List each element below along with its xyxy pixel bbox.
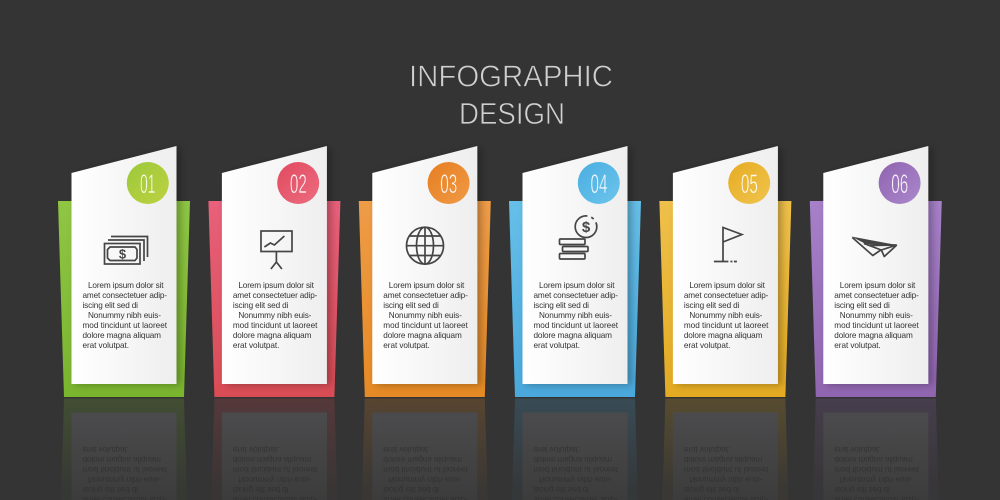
- reflection 6: erat volutpat.: [834, 445, 881, 454]
- reflection 5: erat volutpat.: [684, 445, 730, 454]
- reflection 6: dolore magna aliquam: [834, 455, 913, 464]
- body text 6: iscing elit sed di: [834, 301, 890, 310]
- body text 2: mod tincidunt ut laoreet: [233, 321, 318, 330]
- body text 5: erat volutpat.: [684, 341, 730, 350]
- card 3: orange globe: [359, 146, 491, 397]
- body text 4: Nonummy nibh euis-: [539, 311, 612, 320]
- icon: coins: $: [582, 219, 591, 236]
- reflection 2: dolore magna aliquam: [233, 455, 312, 464]
- body text 2: [233, 281, 318, 350]
- body text 4: Lorem ipsum dolor sit: [539, 281, 615, 290]
- body text 5: [684, 281, 769, 350]
- number badge 02: 02: [290, 169, 307, 199]
- reflection 3: iscing elit sed di: [383, 485, 439, 494]
- body text 3: [383, 281, 469, 350]
- body text 6: dolore magna aliquam: [834, 331, 913, 340]
- body text 4: mod tincidunt ut laoreet: [534, 321, 619, 330]
- title: INFOGRAPHIC: [409, 58, 613, 94]
- reflection 4: Nonummy nibh euis-: [539, 475, 612, 484]
- body text 5: amet consectetuer adip-: [684, 291, 769, 300]
- body text 5: Nonummy nibh euis-: [689, 311, 763, 320]
- body text 4: amet consectetuer adip-: [534, 291, 618, 300]
- body text 6: amet consectetuer adip-: [834, 291, 919, 300]
- reflection 1: mod tincidunt ut laoreet: [82, 465, 168, 474]
- reflection 5: dolore magna aliquam: [684, 455, 763, 464]
- reflection 4: dolore magna aliquam: [534, 455, 612, 464]
- body text 6: erat volutpat.: [834, 341, 881, 350]
- body text 4: dolore magna aliquam: [534, 331, 612, 340]
- body text 1: Nonummy nibh euis-: [88, 311, 161, 320]
- body text 5: Lorem ipsum dolor sit: [689, 281, 766, 290]
- reflection 3: erat volutpat.: [383, 445, 430, 454]
- body text 1: iscing elit sed di: [82, 301, 138, 310]
- reflection 1: erat volutpat.: [82, 445, 129, 454]
- number badge 04: 04: [590, 169, 608, 199]
- icon: paper plane: [851, 236, 897, 256]
- reflection 1: [61, 398, 187, 500]
- body text 2: Lorem ipsum dolor sit: [238, 281, 315, 290]
- reflection 3: mod tincidunt ut laoreet: [383, 465, 469, 474]
- body text 3: mod tincidunt ut laoreet: [383, 321, 469, 330]
- body text 1: erat volutpat.: [82, 341, 129, 350]
- reflection 5: Nonummy nibh euis-: [689, 475, 763, 484]
- body text 2: iscing elit sed di: [233, 301, 289, 310]
- body text 1: Lorem ipsum dolor sit: [88, 281, 164, 290]
- body text 2: Nonummy nibh euis-: [238, 311, 312, 320]
- body text 2: dolore magna aliquam: [233, 331, 312, 340]
- reflection 2: mod tincidunt ut laoreet: [233, 465, 318, 474]
- number badge 01: 01: [140, 169, 156, 199]
- reflection 4: mod tincidunt ut laoreet: [534, 465, 619, 474]
- icon: globe: [406, 227, 444, 264]
- body text 3: Nonummy nibh euis-: [389, 311, 462, 320]
- number badge 02: [277, 162, 319, 204]
- white sheet 1: [72, 146, 176, 384]
- card 4: blue coins: [509, 146, 641, 397]
- number badge 03: [428, 162, 470, 204]
- card 6: purple paper plane: [810, 146, 942, 397]
- body text 1: dolore magna aliquam: [82, 331, 161, 340]
- back panel 1: [58, 201, 190, 397]
- number badge 05: [728, 162, 770, 204]
- body text 2: erat volutpat.: [233, 341, 279, 350]
- reflection 4: iscing elit sed di: [534, 485, 589, 494]
- body text 1: mod tincidunt ut laoreet: [82, 321, 168, 330]
- back panel 2: [208, 201, 340, 397]
- reflection 2: [211, 398, 337, 500]
- reflection 3: dolore magna aliquam: [383, 455, 462, 464]
- white sheet 6: [823, 146, 928, 384]
- body text 2: amet consectetuer adip-: [233, 291, 318, 300]
- reflection 5: [662, 398, 788, 500]
- reflection 4: erat volutpat.: [534, 445, 580, 454]
- reflection 6: iscing elit sed di: [834, 485, 890, 494]
- body text 3: iscing elit sed di: [383, 301, 439, 310]
- icon: banknotes: [104, 236, 148, 264]
- reflection 2: erat volutpat.: [233, 445, 279, 454]
- number badge 06: 06: [891, 169, 908, 199]
- reflection 6: Nonummy nibh euis-: [840, 475, 913, 484]
- body text 1: amet consectetuer adip-: [82, 291, 167, 300]
- reflection 2: iscing elit sed di: [233, 485, 289, 494]
- reflection 1: dolore magna aliquam: [82, 455, 161, 464]
- body text 5: mod tincidunt ut laoreet: [684, 321, 769, 330]
- reflection 5: mod tincidunt ut laoreet: [684, 465, 769, 474]
- number badge 03: 03: [440, 169, 457, 199]
- icon: banknotes: $: [119, 246, 127, 262]
- white sheet 3: [372, 146, 477, 384]
- white sheet 2: [222, 146, 327, 384]
- body text 1: [82, 281, 168, 350]
- number badge 06: [879, 162, 921, 204]
- reflection 3: Nonummy nibh euis-: [389, 475, 462, 484]
- number badge 01: [127, 162, 169, 204]
- white sheet 4: [522, 146, 628, 384]
- body text 3: Lorem ipsum dolor sit: [389, 281, 465, 290]
- icon: flag: [714, 228, 742, 262]
- reflection 5: iscing elit sed di: [684, 485, 740, 494]
- body text 3: amet consectetuer adip-: [383, 291, 468, 300]
- body text 3: erat volutpat.: [383, 341, 430, 350]
- back panel 5: [659, 201, 791, 397]
- title: DESIGN: [459, 96, 565, 131]
- back panel 4: [509, 201, 641, 397]
- body text 6: Nonummy nibh euis-: [840, 311, 913, 320]
- card 1: green money: [58, 146, 190, 397]
- body text 6: Lorem ipsum dolor sit: [840, 281, 916, 290]
- card 2: red chart: [208, 146, 340, 397]
- reflection 2: Nonummy nibh euis-: [238, 475, 312, 484]
- title: [409, 58, 613, 131]
- body text 6: mod tincidunt ut laoreet: [834, 321, 920, 330]
- back panel 6: [810, 201, 942, 397]
- body text 5: dolore magna aliquam: [684, 331, 763, 340]
- reflection 3: [362, 398, 488, 500]
- white sheet 5: [673, 146, 778, 384]
- card 5: yellow flag: [659, 146, 791, 397]
- body text 4: iscing elit sed di: [534, 301, 589, 310]
- icon: presentation chart: [261, 231, 292, 269]
- body text 5: iscing elit sed di: [684, 301, 740, 310]
- number badge 05: 05: [741, 169, 758, 199]
- reflection 4: [512, 398, 638, 500]
- body text 3: dolore magna aliquam: [383, 331, 462, 340]
- reflection 6: [813, 398, 939, 500]
- body text 4: erat volutpat.: [534, 341, 580, 350]
- number badge 04: [578, 162, 620, 204]
- reflection 1: iscing elit sed di: [82, 485, 138, 494]
- icon: coins: [560, 216, 597, 259]
- reflection 6: mod tincidunt ut laoreet: [834, 465, 920, 474]
- body text 4: [534, 281, 619, 350]
- back panel 3: [359, 201, 491, 397]
- body text 6: [834, 281, 920, 350]
- reflection 1: Nonummy nibh euis-: [88, 475, 161, 484]
